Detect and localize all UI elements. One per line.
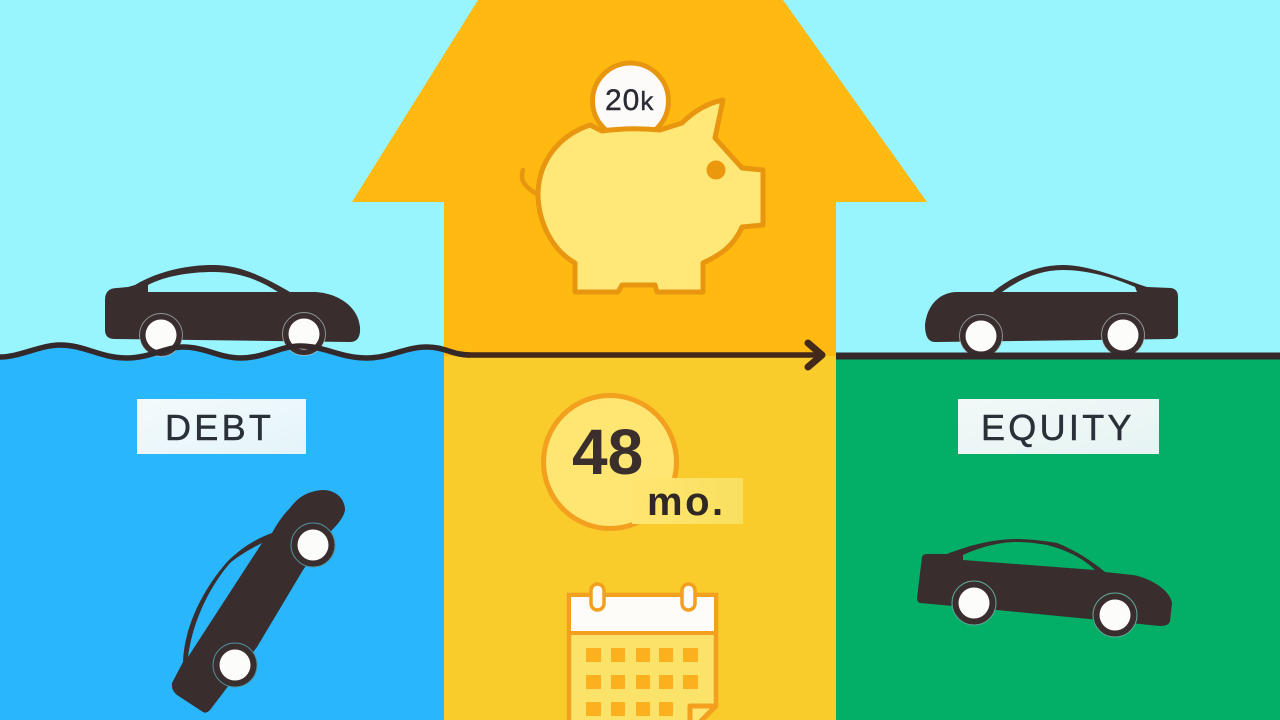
wavy water line [0,345,470,358]
badge: 48 mo. [544,396,743,528]
pig tail [522,170,537,194]
panel: debt water [0,345,444,720]
badge: 48 mo.: mo. [647,480,726,524]
label: equity [958,399,1159,454]
arrow: from debt to equity [468,343,822,367]
badge: 48 mo.: 48 [572,416,643,488]
pig eye [706,160,726,180]
calendar rings [591,584,695,610]
label: equity: EQUITY [981,407,1135,448]
coin: 20k: 20k [605,84,654,117]
calendar day grid [586,648,698,716]
calendar icon [569,584,719,720]
upward arrow [352,0,927,356]
panel: equity ground [836,358,1280,720]
calendar page fold [690,703,719,720]
calendar header [571,597,714,632]
pig body [538,100,763,292]
label: debt [137,399,306,454]
car: sinking nose-up in debt [172,490,345,713]
panel: center lower [444,355,836,720]
piggy bank icon [522,63,763,292]
car: slightly tilted in equity [917,539,1172,637]
sky background [0,0,1280,360]
label: debt: DEBT [165,407,274,448]
coin: 20k [592,63,668,139]
car: equity, on solid ground [925,265,1178,358]
equity ground line [836,352,1280,360]
car: debt, floating on water [105,265,360,356]
